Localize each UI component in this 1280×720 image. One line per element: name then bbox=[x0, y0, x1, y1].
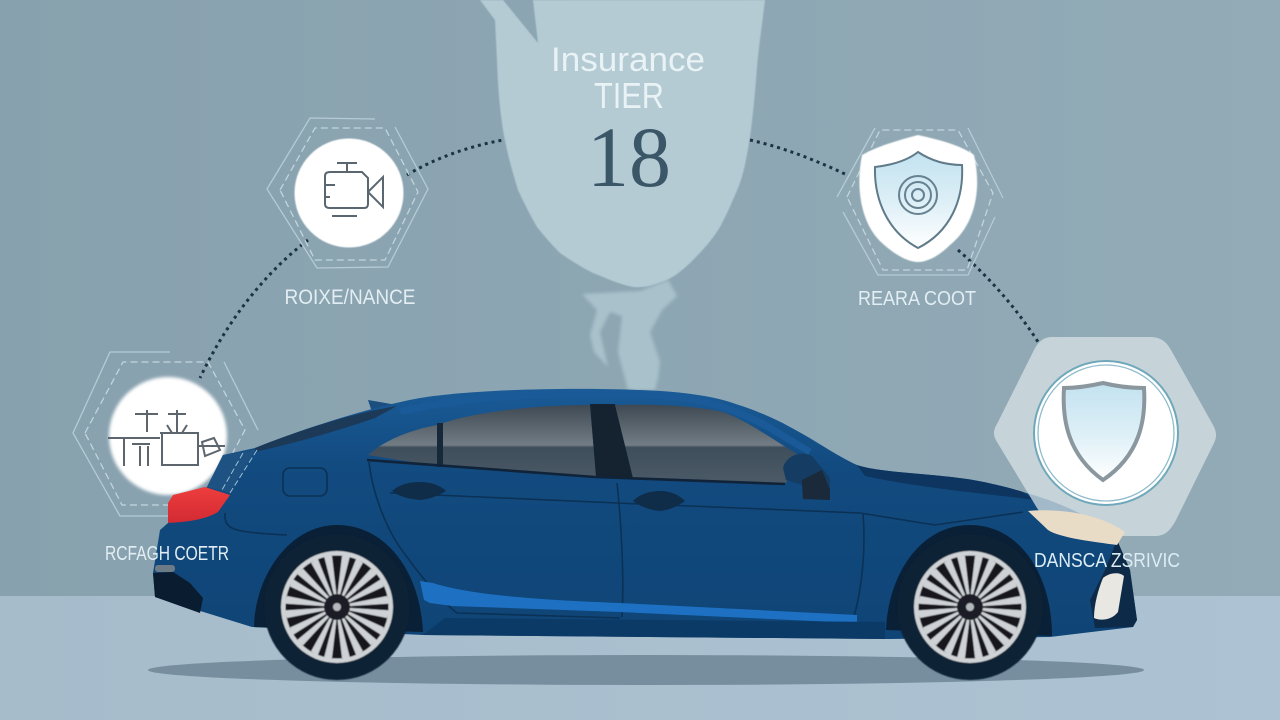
rear bumper bbox=[153, 572, 203, 613]
target rings bbox=[899, 176, 937, 214]
label: repair cost: RCFAGH COETR bbox=[105, 543, 229, 565]
daytime light bbox=[1094, 573, 1124, 620]
front wheel arch bbox=[886, 525, 1052, 636]
heading: Insurance bbox=[551, 41, 705, 79]
rear door glass bbox=[443, 405, 596, 476]
rear deck dark band bbox=[255, 406, 397, 452]
body lines bbox=[225, 462, 1023, 620]
front wheel bbox=[897, 534, 1043, 680]
hexagon frame bbox=[837, 128, 1003, 275]
dashed hexagon bbox=[847, 130, 993, 270]
car body bbox=[153, 389, 1137, 639]
front grille dark bbox=[1090, 540, 1137, 628]
window sill line bbox=[367, 460, 785, 484]
pillar bbox=[590, 404, 633, 478]
inner ring bbox=[1038, 365, 1174, 501]
icon: shield bbox=[1064, 383, 1144, 480]
rear wheel bbox=[264, 534, 410, 680]
white disc with ring bbox=[1034, 361, 1178, 505]
hexagon frame bbox=[267, 118, 428, 268]
rear glass lines bbox=[222, 450, 257, 493]
lower sill bbox=[423, 618, 885, 639]
dashed hexagon bbox=[85, 362, 245, 505]
white disc bbox=[109, 377, 227, 495]
roof highlight bbox=[400, 394, 810, 452]
headlight bbox=[1028, 510, 1125, 545]
floor bbox=[0, 596, 1280, 720]
node: shield cost bbox=[837, 128, 1003, 310]
rear glass panel bbox=[207, 450, 255, 493]
dashed hexagon bbox=[280, 128, 418, 260]
hexagon frame bbox=[73, 352, 258, 516]
smoke wisps bbox=[582, 280, 677, 390]
quarter glass bbox=[368, 425, 437, 466]
icon: engine bbox=[325, 163, 383, 216]
white disc bbox=[294, 138, 404, 248]
smoke bowl bbox=[480, 0, 765, 287]
hood shadow bbox=[857, 465, 1035, 500]
sill highlight bbox=[420, 581, 857, 623]
label: REARA COOT bbox=[858, 288, 976, 310]
white shield badge bbox=[859, 135, 977, 262]
front door glass bbox=[615, 405, 800, 483]
shield outline bbox=[875, 152, 962, 248]
tail light bbox=[168, 487, 230, 523]
rear spoiler bbox=[368, 400, 397, 412]
car bbox=[153, 389, 1137, 680]
quarter pillar bbox=[437, 423, 443, 467]
label: ROIXE/NANCE bbox=[284, 286, 416, 309]
label: damage servicing: DANSCA ZSRIVIC bbox=[1034, 550, 1180, 572]
mirror stalk bbox=[802, 470, 830, 500]
reflector bbox=[155, 565, 175, 572]
dotted connector arcs bbox=[200, 140, 1040, 378]
door handles bbox=[392, 482, 446, 500]
central smoke shape with tier readout bbox=[480, 0, 765, 390]
subheading: TIER bbox=[594, 75, 664, 116]
rear wheel arch bbox=[254, 525, 423, 632]
car ground shadow bbox=[148, 655, 1144, 685]
node: damage servicing bbox=[994, 337, 1216, 536]
side mirror bbox=[783, 454, 830, 500]
icon: shield with target bbox=[875, 152, 962, 248]
node: engine / maintenance bbox=[267, 118, 428, 309]
icon: machinery bbox=[108, 410, 225, 466]
tier number: 18 bbox=[587, 109, 671, 205]
translucent hexagon bbox=[994, 337, 1216, 536]
node: repair cost bbox=[73, 352, 258, 516]
